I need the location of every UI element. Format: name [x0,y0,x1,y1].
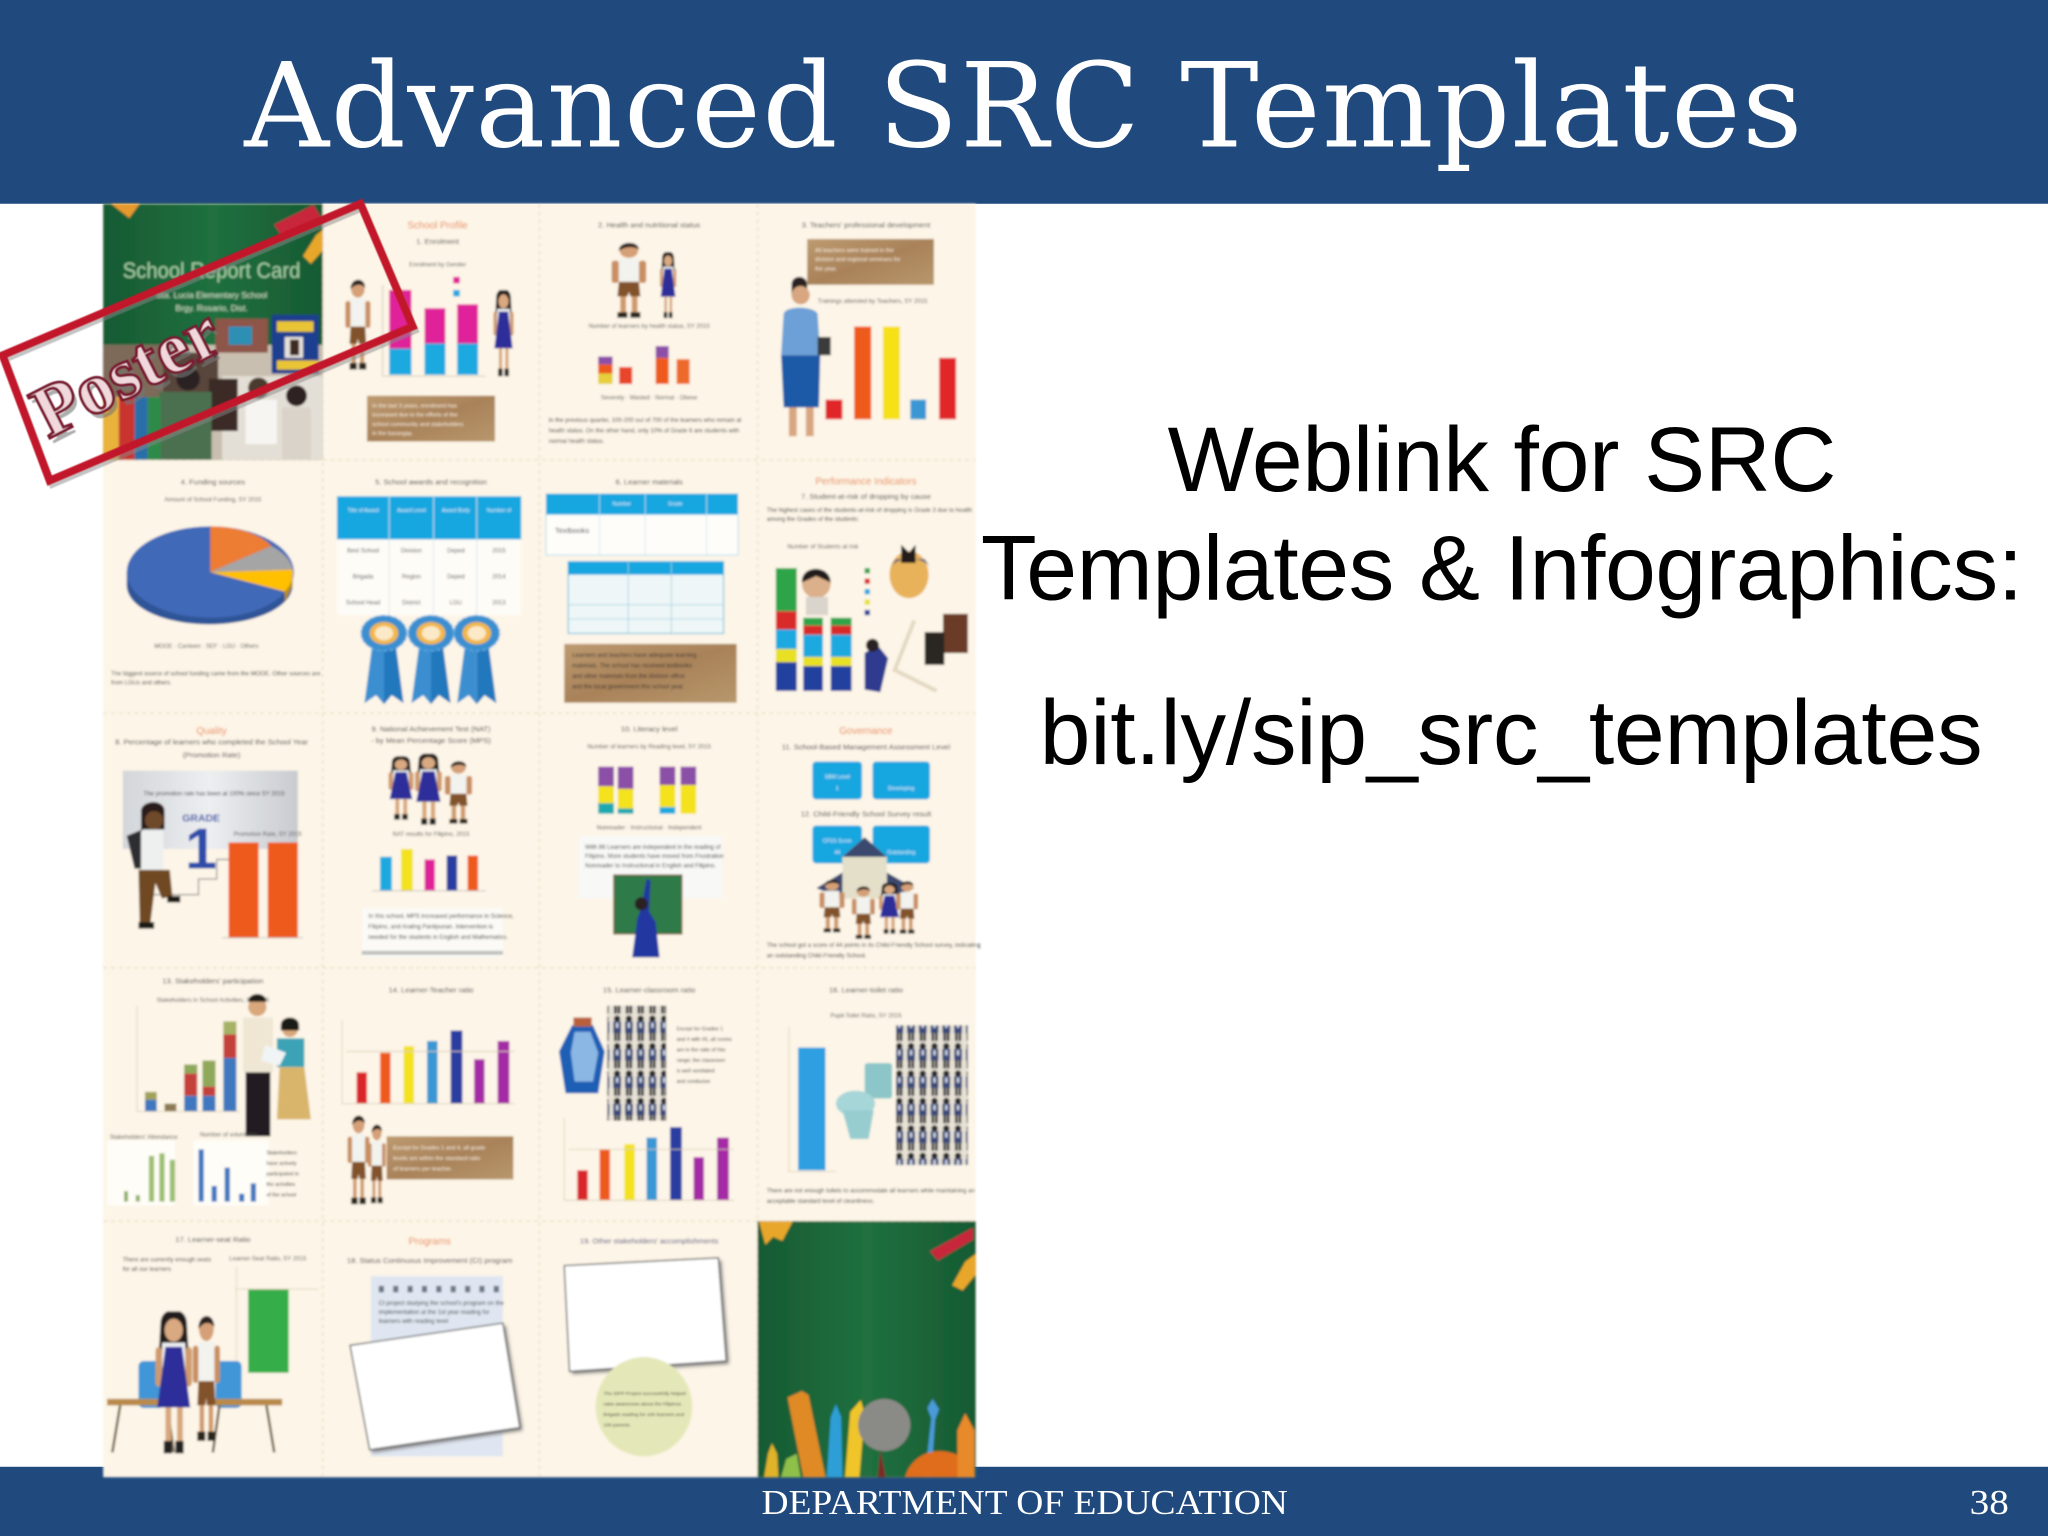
note box [564,644,737,703]
panel: funding sources [111,478,321,686]
panel: performance indicators: Number of Students at risk [787,545,859,551]
note box: the year. [815,266,837,272]
classroom text [677,1027,732,1085]
panel: quality promotion rate: (Promotion Rate) [183,751,241,760]
stakeholder text: the activities [266,1182,296,1188]
note paper: The promotion rate has been at 100% since SY 2015 [144,791,285,797]
icon: father and mother with child [243,994,311,1136]
cover title: School Report Card [123,258,300,283]
panel: programs: Programs [409,1237,451,1248]
toilet text: There are not enough toilets to accommodate all learners while maintaining an [767,1188,975,1194]
legend [865,568,870,615]
note paper: With 86 Learners are independent in the reading of [585,845,721,851]
awards table: Brigada [353,575,374,581]
panel: school profile enrolment [345,221,514,441]
stakeholder text: Stakeholders [266,1151,297,1157]
note box: All teachers were trained in the [815,248,894,254]
page number: 38 [1970,1483,2009,1522]
icon: grade 1 label: GRADE [182,814,220,825]
panel: learner-toilet ratio: Pupil-Toilet Ratio, SY 2015 [830,1013,902,1019]
panel: learner-seat ratio: There are currently enough seats [123,1258,211,1264]
panel: cover [103,204,323,460]
note box: materials. The school has received textbooks [572,663,692,669]
icon: two boys [348,1116,386,1204]
table one: Number [612,501,631,507]
note paper [123,771,298,849]
awards table: Region [402,575,421,581]
icon: grade 1 label: 1 [185,818,217,882]
panel: performance indicators: 7. Student-at-risk of dropping by cause [801,492,931,501]
awards table: LGU [450,601,462,607]
note box: in the barangay. [372,431,413,437]
icon: crayons and pencils [759,1221,976,1477]
small bar charts: Stakeholders' Attendance [110,1135,178,1141]
yellow-green callout: The SIPP Project successfully helped [603,1391,686,1397]
note paper: Filipino, and Araling Panlipunan. Intervention is [368,925,493,931]
pie legend: MOOE · Canteen · SEF · LGU · Others [154,644,259,650]
awards table: Best School [347,548,379,554]
note box: In the last 3 years, enrolment has [372,404,457,410]
toilet text: acceptable standard level of cleanliness. [767,1199,875,1205]
icon: toilet [836,1063,892,1139]
yellow-green callout: Brigade reading for 100 learners and [603,1412,684,1418]
CFS tiles [812,825,930,863]
panel: learner-toilet ratio: 16. Learner-toilet ratio [829,986,903,995]
panel: cover: Sta. Lucia Elementary School [156,290,267,300]
icon: three seated students [389,753,472,825]
note box: Except for Grades 1 and 4, all grade [393,1145,485,1151]
weblink heading [981,409,2023,620]
yellow-green callout [596,1357,692,1456]
panel: governance: 11. School-Based Management Assessment Level [782,743,950,752]
panel: learner-teacher ratio: 14. Learner-Teacher ratio [389,986,473,995]
stacked bars: dropout causes [776,568,852,691]
awards table: Award Level [397,508,426,514]
governance text [767,943,980,959]
classroom text: are in the ratio of this [677,1047,726,1053]
note box: Learners and teachers have adequate learning [572,653,697,659]
panel: school profile enrolment: Enrolment by Gender [409,262,466,268]
icon: blue jar [559,1017,605,1093]
classroom text: Except for Grades 1 [677,1027,723,1033]
toilet text [767,1188,975,1205]
panel: governance [767,726,980,959]
panel: national achievement test: NAT results for Filipino, 2015 [393,832,470,838]
panel: literacy level [579,724,724,957]
panel: other stakeholders' accomplishments [564,1236,729,1456]
panel: school profile enrolment: School Profile [407,221,468,232]
notebook: learners with reading level [379,1319,448,1325]
panel: school awards and recognition [337,478,521,704]
classroom text: is well ventilated [677,1068,715,1074]
note paper: needed for the students in English and Mathematics. [368,935,508,941]
title: Advanced SRC Templates [243,37,1802,174]
stacked bar chart: enrolment [383,277,486,376]
panel: stakeholders' participation: 13. Stakeholders' participation [162,977,263,986]
stakeholder text [266,1151,299,1198]
classroom text: range; the classroom [677,1058,725,1064]
panel: stakeholders' participation: Stakeholders in School Activities, SY 2015 [157,998,270,1004]
blank photo frame [564,1258,729,1374]
icon: boy with backpack [345,280,370,370]
note box [367,396,495,441]
panel: learner-teacher ratio [342,986,515,1204]
panel: programs: 18. Status Continuous Improvement (CI) program [347,1256,513,1265]
awards table: District [402,601,421,607]
classroom text: and conducive [677,1079,710,1085]
footer banner [0,1467,2048,1536]
red frame [3,204,415,485]
small bar charts: Number of volunteers [200,1132,257,1138]
weblink text block [981,409,2023,784]
panel: health and nutritional status: Severely · Wasted · Normal · Obese [601,396,698,402]
note box: levels are within the standard ratio [393,1156,480,1162]
funding text: The biggest source of school funding came from the MOOE. Other sources are [111,671,321,677]
icon: girl writing on blackboard [614,875,682,957]
panel: funding sources: 4. Funding sources [181,478,245,487]
SBM tiles: Developing [888,786,914,792]
note paper: Filipino. More students have moved from Frustration [585,854,724,860]
panel: literacy level: Number of learners by Reading level, SY 2015 [587,744,712,750]
funding text: from LGUs and others. [111,680,172,686]
health summary text [549,418,742,445]
panel: national achievement test: - by Mean Percentage Score (MPS) [371,736,491,745]
panel: learners' professional development [781,220,956,436]
icon: girl, boy and blue chairs [107,1310,282,1453]
bar chart: promotion rate [222,832,303,938]
CFS tiles: 44 [834,850,840,856]
awards table: 2014 [492,575,506,581]
panel: learner materials: 6. Learner materials [616,478,683,487]
pie chart [127,526,294,624]
awards table: Award Body [442,508,470,514]
stacked bars: literacy [598,767,696,814]
panel: health and nutritional status: Number of learners by health status, SY 2015 [588,324,710,330]
health summary text: health status. On the other hand, only 10% of Grade 6 are students with [549,428,739,434]
panel: funding sources: Amount of School Funding, SY 2015 [164,498,262,504]
poster label: Poster [19,291,233,453]
panel: learner-seat ratio: for all our learners [123,1267,171,1273]
governance text: an outstanding Child-Friendly School. [767,953,867,959]
SBM tiles: 1 [836,786,839,792]
stacked bar chart: stakeholders [137,1006,240,1112]
blank photo frame [350,1323,522,1452]
health summary text: In the previous quarter, 100-200 out of 700 of the learners who remain at [549,418,742,424]
panel: programs [347,1237,522,1456]
bar chart: toilet ratio [789,1027,836,1172]
funding text [111,671,321,686]
cover crayons [111,204,323,264]
icon: crowd of students [607,1006,666,1121]
CFS tiles: CFSS Score [823,838,852,844]
panel: quality promotion rate [115,726,309,938]
note box: division and regional seminars for [815,257,901,263]
bar chart: trainings [825,327,956,419]
awards table [337,496,521,615]
panel: performance indicators: The highest cases of the students-at-risk of dropping is Grade 3 due to health [767,508,972,514]
note paper [362,908,514,957]
stakeholder text: have actively [266,1161,297,1167]
small bar charts [107,1132,269,1206]
panel: performance indicators [767,477,972,692]
panel: stakeholders' participation [107,977,311,1206]
table one: Textbooks [555,526,589,535]
panel: literacy level: Nonreader · Instructional · Independent [597,825,702,831]
icon: award ribbons [361,615,500,704]
bar chart: seat ratio [235,1267,319,1374]
notebook [371,1276,505,1456]
stakeholder text: participated in [266,1172,299,1178]
table two [568,562,724,633]
panel: learner materials [546,478,738,703]
weblink url: bit.ly/sip_src_templates [1040,682,1983,784]
bar chart: NAT results [372,849,486,891]
classroom text: and 4 with 45, all rooms [677,1037,732,1043]
CFS tiles: Outstanding [887,850,915,856]
icon: girl in blue uniform [493,289,514,376]
panel: literacy level: 10. Literacy level [621,724,678,733]
note box: school community and stakeholders [372,422,464,428]
note paper: In this school, MPS increased performance in Science, [368,914,514,920]
icon: overweight boy and thin girl [612,243,676,318]
panel: learner-classroom ratio [559,986,734,1200]
panel: performance indicators: among the Grades of the students: [767,517,859,523]
poster callout stamp [3,204,415,485]
poster label: Poster [23,296,237,458]
bar chart: learner-teacher [342,1020,515,1104]
panel: performance indicators: Performance Indicators [815,477,917,488]
stacked bar chart: nutrition [598,346,690,384]
panel: learner-seat ratio [107,1235,319,1453]
panel: quality promotion rate: 8. Percentage of learners who completed the School Year [115,737,309,746]
icon: school building with children [816,837,918,939]
header banner [0,0,2048,204]
panel: other stakeholders' accomplishments: 19. Other stakeholders' accomplishments [580,1236,719,1245]
SBM tiles [812,761,930,799]
awards table: School Head [346,601,380,607]
awards table: Division [401,548,422,554]
panel: governance: Governance [839,726,893,737]
panel: governance: 12. Child-Friendly School Survey result [801,809,932,818]
bar chart: promotion rate: Promotion Rate, SY 2015 [234,832,302,838]
table one: Grade [668,501,683,507]
table one [546,494,738,555]
note box [807,239,934,285]
SBM tiles: SBM Level [825,774,850,780]
panel: quality promotion rate: Quality [196,726,227,737]
panel: learners' professional development: 3. Teachers' professional development [802,220,931,229]
panel: national achievement test [362,724,514,957]
awards table: 2013 [492,601,506,607]
panel: learner-classroom ratio: 15. Learner-classroom ratio [603,986,695,995]
panel: school awards and recognition: 5. School awards and recognition [375,478,487,487]
icon: boy climbing steps [127,802,232,929]
weblink heading: Weblink for SRC [1168,409,1836,511]
weblink heading: Templates & Infographics: [981,518,2023,620]
panel: learner-seat ratio: 17. Learner-seat Ratio [175,1235,251,1244]
panel: school profile enrolment: 1. Enrolment [416,237,460,246]
note box: increased due to the efforts of the [372,413,458,419]
icon: student falling and books [865,614,968,692]
footer department name: DEPARTMENT OF EDUCATION [761,1483,1288,1522]
panel: cover: Brgy. Rosario, Dist. [175,303,248,313]
note paper: Nonreader to Instructional in English and Filipino. [585,863,716,869]
icon: teacher figure [781,277,831,436]
school report card poster thumbnail grid [103,204,980,1477]
panel: learner-toilet ratio [767,986,975,1205]
panel: health and nutritional status [549,220,742,445]
panel: health and nutritional status: 2. Health and nutritional status [598,220,700,229]
notebook: implementation at the 1st year reading for [379,1310,490,1316]
note box [387,1136,513,1179]
awards table: Title of Award [347,508,379,514]
awards table: Deped [447,548,465,554]
awards table: Deped [447,575,465,581]
yellow-green callout: raise awareness about the Filipinos [603,1401,682,1407]
yellow-green callout: 100 parents. [603,1422,631,1428]
panel: learner-seat ratio: Learner-Seat Ratio, SY 2015 [229,1256,307,1262]
stakeholder text: of the school [266,1192,296,1198]
notebook: CI project studying the school's program on the [379,1301,505,1307]
governance text: The school got a score of 44 points in its Child-Friendly School survey, indicating [767,943,980,949]
panel: national achievement test: 9. National Achievement Test (NAT) [371,724,491,733]
note paper [579,836,724,899]
health summary text: normal health status. [549,439,605,445]
bar chart: classroom ratio [564,1118,734,1200]
cover photo collage [103,315,323,460]
panel: learners' professional development: Trainings attended by Teachers, SY 2015 [818,299,928,305]
icon: worried girl and boy with bandage [802,545,930,615]
note box: and other materials from the division office [572,674,685,680]
icon: crowd of students [896,1025,968,1165]
awards table: 2015 [492,548,506,554]
panel: back cover [758,1221,976,1477]
awards table: Number of [487,508,512,514]
note box: and the local government this school year. [572,684,684,690]
note box: of learners per teacher. [393,1166,453,1172]
